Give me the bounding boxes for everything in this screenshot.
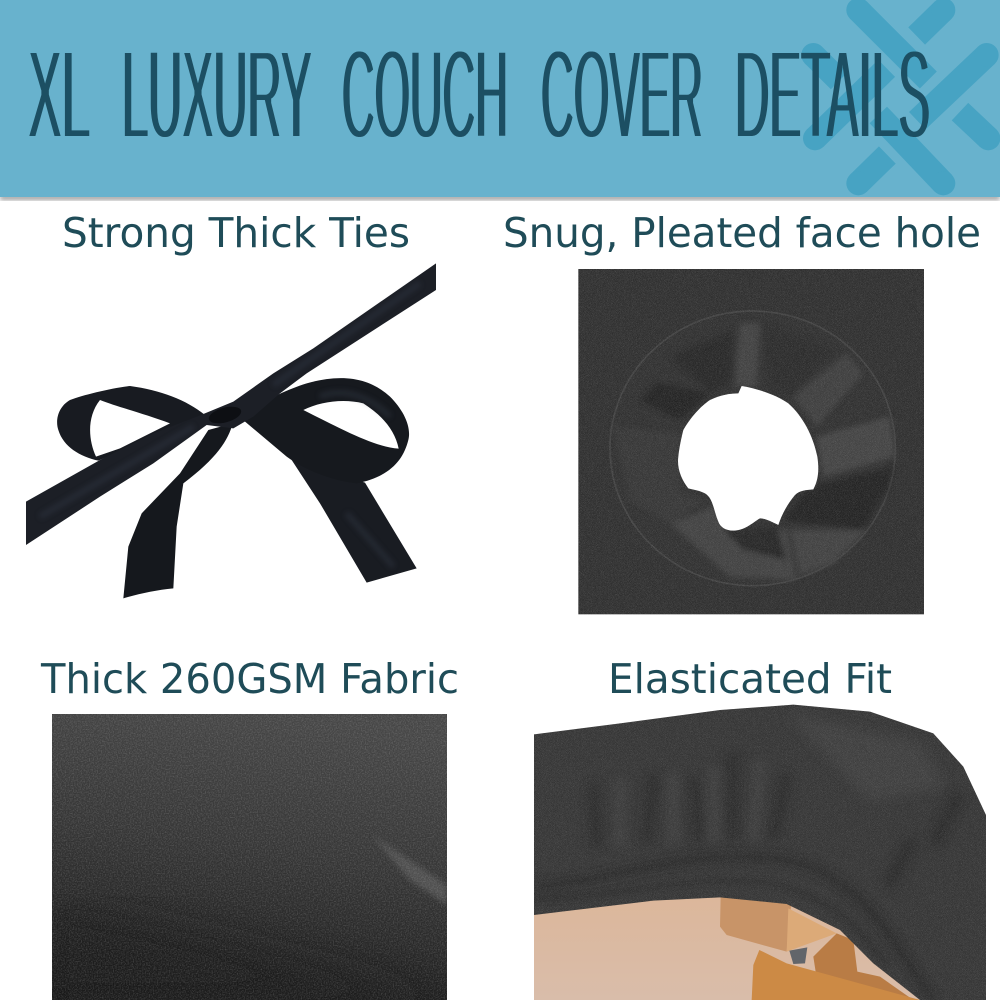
- title: XL: [28, 24, 90, 165]
- panel: ribbon bow: [26, 263, 436, 598]
- elastic hem and shading: [534, 700, 987, 1000]
- fabric grain: [534, 700, 987, 1000]
- bolt: [789, 947, 807, 964]
- ribbon sheen: [40, 283, 420, 567]
- wood block: [720, 897, 792, 952]
- left loop: [57, 386, 205, 461]
- title: [28, 24, 930, 165]
- panel: thick fabric: [52, 714, 447, 1000]
- knot: [207, 404, 243, 426]
- panel: pleated face hole: [578, 269, 924, 614]
- header banner: [0, 0, 1000, 200]
- wood rail back: [813, 933, 913, 1000]
- left tail: [123, 423, 233, 598]
- icon: woven X logo: [801, 0, 1000, 195]
- face hole: [678, 386, 818, 531]
- fabric grain: [578, 269, 924, 614]
- heading: Thick 260GSM Fabric: Thick 260GSM Fabric: [40, 655, 459, 703]
- heading: Elasticated Fit: Elasticated Fit: [608, 655, 892, 703]
- ring seam: [610, 311, 895, 586]
- fabric grain: [52, 714, 447, 1000]
- heading: Strong Thick Ties: Strong Thick Ties: [62, 209, 410, 257]
- panel: elasticated fit: [534, 700, 987, 1000]
- title: COUCH: [342, 24, 508, 165]
- cover fabric: [534, 705, 986, 1000]
- right tail: [292, 460, 417, 583]
- title: LUXURY: [122, 24, 312, 165]
- wood leg: [752, 950, 920, 1000]
- light fold at right edge: [378, 840, 447, 904]
- dark lower-left shade: [52, 905, 447, 1000]
- title: COVER: [541, 24, 703, 165]
- heading: Snug, Pleated face hole: Snug, Pleated face hole: [503, 209, 981, 257]
- wall behind: [534, 887, 921, 1000]
- right loop: [240, 378, 409, 483]
- pleat shading: [613, 323, 895, 580]
- main ribbon: [26, 263, 436, 545]
